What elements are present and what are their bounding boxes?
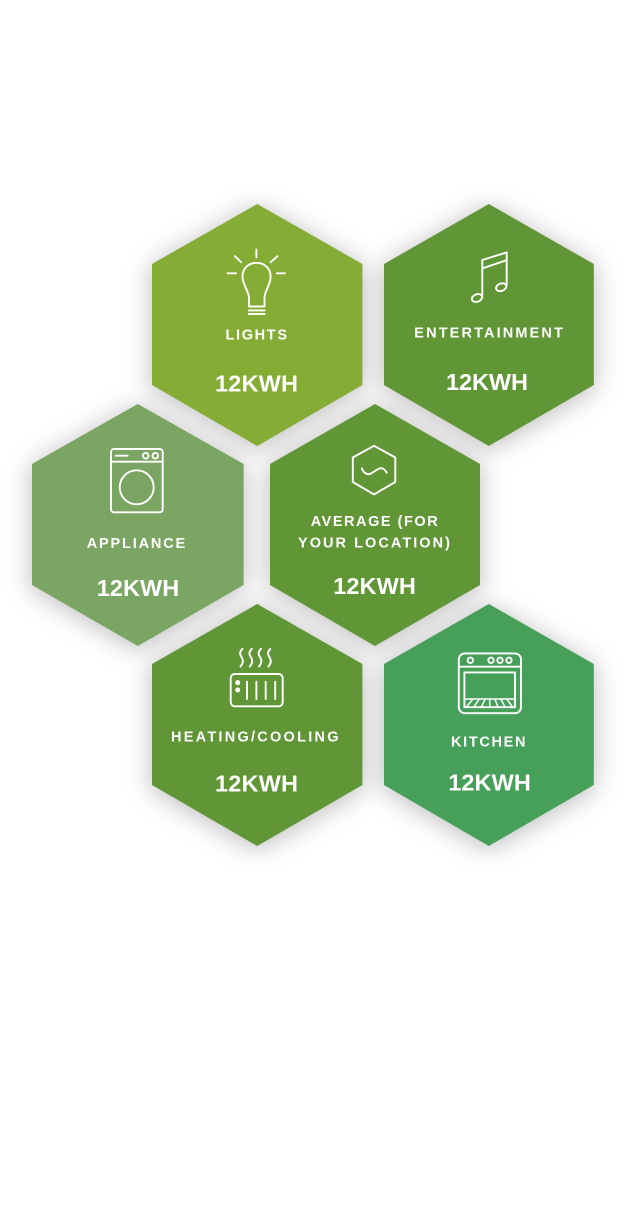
panel: entertainment — [384, 204, 594, 446]
panel: average — [270, 404, 480, 646]
label: entertainment: ENTERTAINMENT — [414, 326, 563, 342]
label: appliance: APPLIANCE — [87, 536, 186, 552]
value: lights: 12KWH — [215, 371, 298, 397]
icon: oven — [459, 653, 521, 713]
value: kitchen: 12KWH — [448, 770, 531, 796]
label: average: AVERAGE (FOR — [311, 514, 438, 530]
value: heating/cooling: 12KWH — [215, 771, 298, 797]
value: appliance: 12KWH — [97, 575, 179, 601]
hexagon: entertainment — [384, 204, 594, 446]
hexagon: appliance — [32, 404, 244, 646]
label: average: YOUR LOCATION) — [298, 536, 450, 552]
hexagon: lights — [152, 204, 362, 446]
panel: lights — [152, 204, 362, 446]
icon: light bulb — [228, 250, 285, 314]
hexagon: average — [270, 404, 480, 646]
label: average — [298, 514, 450, 552]
hexagon: heating/cooling — [152, 604, 362, 846]
value: average: 12KWH — [333, 573, 416, 599]
label: kitchen: KITCHEN — [451, 735, 526, 751]
panel: appliance — [32, 404, 244, 646]
soft shadows behind hexagons — [32, 204, 594, 846]
panel: kitchen — [384, 604, 594, 846]
icon: washing machine — [111, 449, 163, 512]
hexagon: kitchen — [384, 604, 594, 846]
icon: radiator — [231, 649, 283, 706]
panel: heating/cooling — [152, 604, 362, 846]
value: entertainment: 12KWH — [446, 369, 528, 395]
icon: music notes — [471, 252, 507, 303]
label: heating/cooling: HEATING/COOLING — [171, 730, 338, 746]
label: lights: LIGHTS — [226, 328, 287, 344]
icon: hexagon wave — [353, 446, 395, 494]
